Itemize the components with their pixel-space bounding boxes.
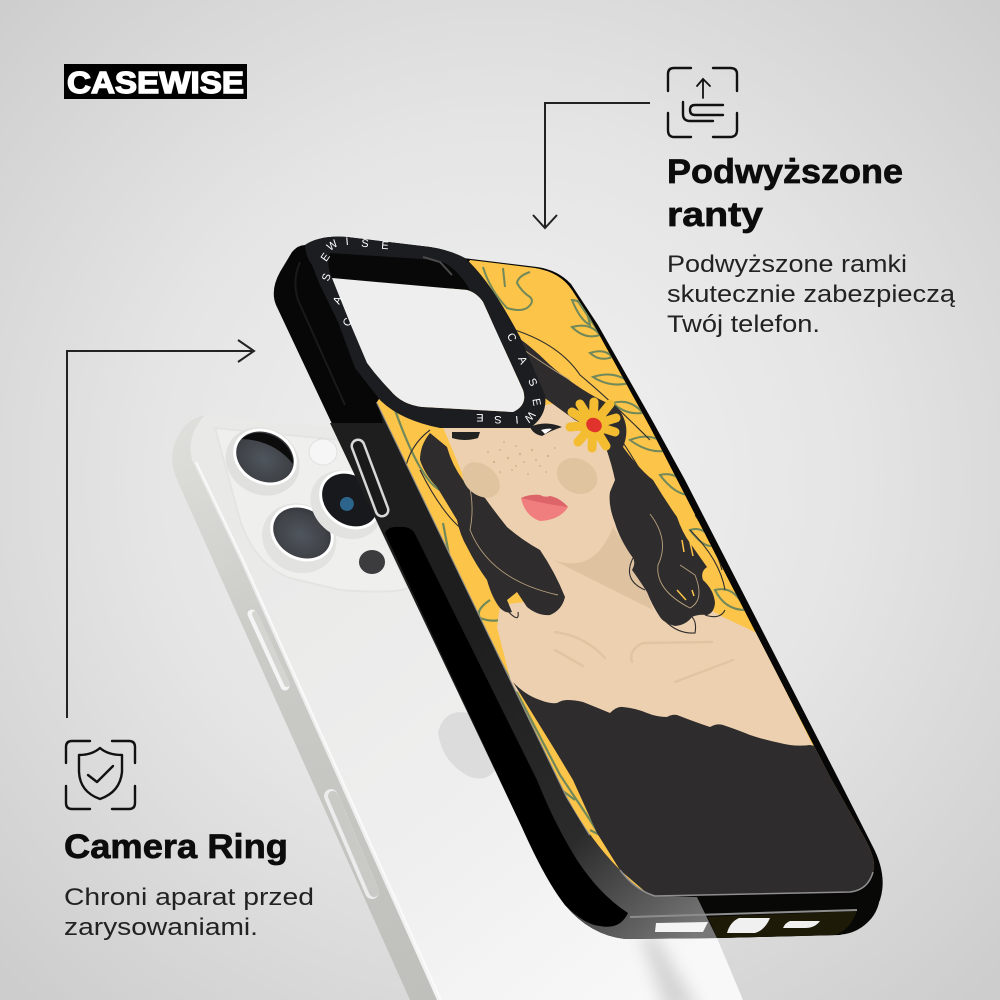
port: speaker (655, 922, 708, 932)
ring lettering: A (331, 294, 345, 306)
side button upper (252, 614, 287, 686)
arrow: top callout to raised edges (533, 103, 650, 228)
text: camera ring description: Chroni aparat przed (64, 884, 314, 911)
phone side edge (172, 415, 437, 1000)
text: raised edges description: skutecznie zabezpieczą (667, 281, 956, 308)
hair strands dark (405, 330, 725, 633)
flower (570, 402, 616, 448)
hair left (420, 433, 565, 615)
black dress (513, 682, 890, 900)
ring lettering: C (504, 331, 518, 344)
screen edge highlight (620, 870, 873, 896)
case body (274, 237, 883, 939)
lens right (297, 455, 397, 553)
left cheek (462, 462, 500, 498)
icon: raised edges (668, 68, 737, 137)
skin: face neck and chest (440, 400, 820, 760)
ring opening (332, 278, 524, 412)
ring inner top wall (328, 253, 470, 290)
yellow hair highlights (677, 540, 694, 600)
text: raised edges description: Twój telefon. (667, 311, 820, 338)
bottom black section (697, 870, 880, 938)
ring frame (305, 237, 545, 428)
ring inner highlight (423, 257, 452, 275)
phone body (172, 415, 743, 1000)
apple logo (438, 712, 500, 779)
port: microphone (783, 921, 820, 928)
hair right (490, 320, 715, 626)
camera ring (305, 236, 545, 428)
ring lettering: C (341, 316, 355, 329)
text: camera ring description: zarysowaniami. (64, 914, 258, 941)
collarbone lines (555, 632, 733, 682)
heading: Podwyższone ranty: ranty (667, 196, 763, 234)
ring lettering: W (325, 238, 341, 254)
text: camera ring description (64, 884, 314, 941)
volume button (358, 446, 382, 510)
arrow: left callout to camera ring (67, 340, 254, 718)
ring lettering: E (476, 411, 484, 423)
artwork yellow background (370, 250, 890, 900)
heading: Camera Ring: Camera Ring (64, 828, 288, 866)
neck shadow (554, 528, 653, 610)
camera plateau (215, 428, 408, 592)
bottom olive band (708, 911, 857, 938)
edge highlight (196, 462, 441, 1000)
ring lettering: S (320, 272, 334, 283)
text: raised edges description: Podwyższone ramki (667, 251, 907, 278)
ring lettering: E (319, 251, 333, 264)
ring lettering: I (345, 236, 349, 248)
case wall lower panel (330, 402, 717, 939)
bottom ledge highlight (630, 910, 857, 917)
side button lower (331, 796, 374, 892)
lips (521, 495, 568, 521)
flash (309, 439, 337, 465)
ring lettering: E (529, 398, 543, 407)
right cheek (557, 458, 597, 494)
sensor (359, 550, 385, 574)
hair strands light (468, 345, 699, 608)
heading: Podwyższone ranty (667, 153, 903, 234)
ring lettering: S (361, 238, 369, 250)
case wall highlight (295, 262, 345, 405)
lens bottom (250, 490, 349, 586)
black case (274, 237, 883, 939)
ring lettering: W (521, 409, 537, 425)
logo: CASEWISE: CASEWISE (67, 65, 244, 100)
white phone (172, 414, 743, 1000)
ring lettering: S (525, 377, 539, 388)
icon: shield with check (66, 741, 135, 809)
case artwork: illustrated woman (370, 250, 890, 900)
leaves and vines (395, 267, 757, 870)
eye right (530, 424, 562, 436)
lens top (214, 414, 312, 508)
freckles (487, 441, 556, 475)
shadow on phone back (640, 935, 700, 1000)
text: raised edges description (667, 251, 956, 338)
heading: Podwyższone ranty: Podwyższone (667, 153, 903, 191)
side slot (385, 527, 628, 927)
ring lettering: E (381, 240, 389, 252)
ring lettering: S (494, 413, 502, 425)
eye left (452, 432, 480, 440)
ring lettering (319, 236, 543, 425)
port: charging (727, 918, 770, 933)
ring lettering: I (515, 413, 519, 425)
screen side highlight (377, 402, 590, 835)
ring lettering: A (515, 355, 529, 367)
